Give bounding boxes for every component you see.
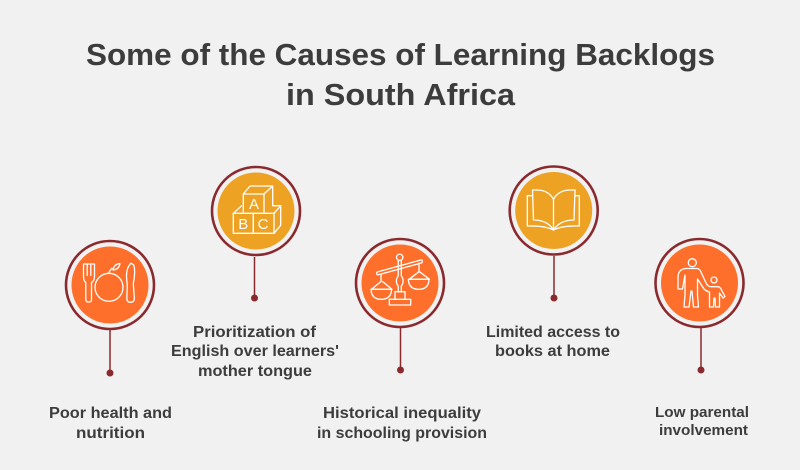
label 1: [49, 405, 172, 442]
label 5: Low parental: [655, 404, 749, 421]
label 1: Poor health and: [49, 405, 172, 422]
ring 2: [212, 167, 300, 255]
title: Some of the Causes of Learning Backlogs: [86, 37, 715, 72]
disc 4: [515, 172, 592, 249]
connector line 2: [251, 257, 258, 302]
icon: open book: [527, 190, 579, 230]
ring 1: [66, 241, 154, 329]
icon: alphabet blocks: A: [249, 196, 259, 213]
label 3: in schooling provision: [317, 425, 487, 442]
title: in South Africa: [286, 77, 516, 112]
label 3: Historical inequality: [323, 405, 481, 422]
disc 5: [661, 244, 738, 322]
connector line 3: [397, 328, 404, 374]
label 4: books at home: [495, 343, 610, 360]
disc 3: [362, 244, 438, 322]
label 2: mother tongue: [198, 363, 312, 380]
item: prioritization of English: [171, 167, 339, 380]
item: limited access to books: [486, 166, 620, 360]
title: [86, 37, 715, 112]
disc 1: [72, 246, 148, 324]
label 2: Prioritization of: [193, 324, 317, 341]
icon: alphabet blocks: [233, 186, 281, 233]
connector line 5: [698, 328, 704, 374]
ring 3: [356, 239, 444, 327]
item: low parental involvement: [655, 239, 749, 439]
label 1: nutrition: [76, 425, 145, 442]
icon: alphabet blocks: B: [238, 216, 248, 233]
label 2: English over learners': [171, 343, 339, 360]
icon: alphabet blocks: C: [258, 216, 269, 233]
connector line 1: [106, 330, 114, 376]
disc 2: [218, 172, 294, 250]
item: historical inequality: [317, 239, 487, 442]
label 4: [486, 324, 620, 360]
icon: fork, apple and knife: [83, 263, 135, 302]
icon: balance scales: [371, 254, 430, 305]
label 2: [171, 324, 339, 380]
ring 5: [656, 239, 744, 327]
label 5: [655, 404, 749, 439]
label 4: Limited access to: [486, 324, 620, 341]
connector line 4: [550, 256, 558, 302]
label 5: involvement: [659, 422, 748, 439]
icon: parent and child: [678, 259, 725, 307]
label 3: [317, 405, 487, 442]
item: poor health and nutrition: [49, 241, 172, 442]
ring 4: [510, 166, 598, 254]
